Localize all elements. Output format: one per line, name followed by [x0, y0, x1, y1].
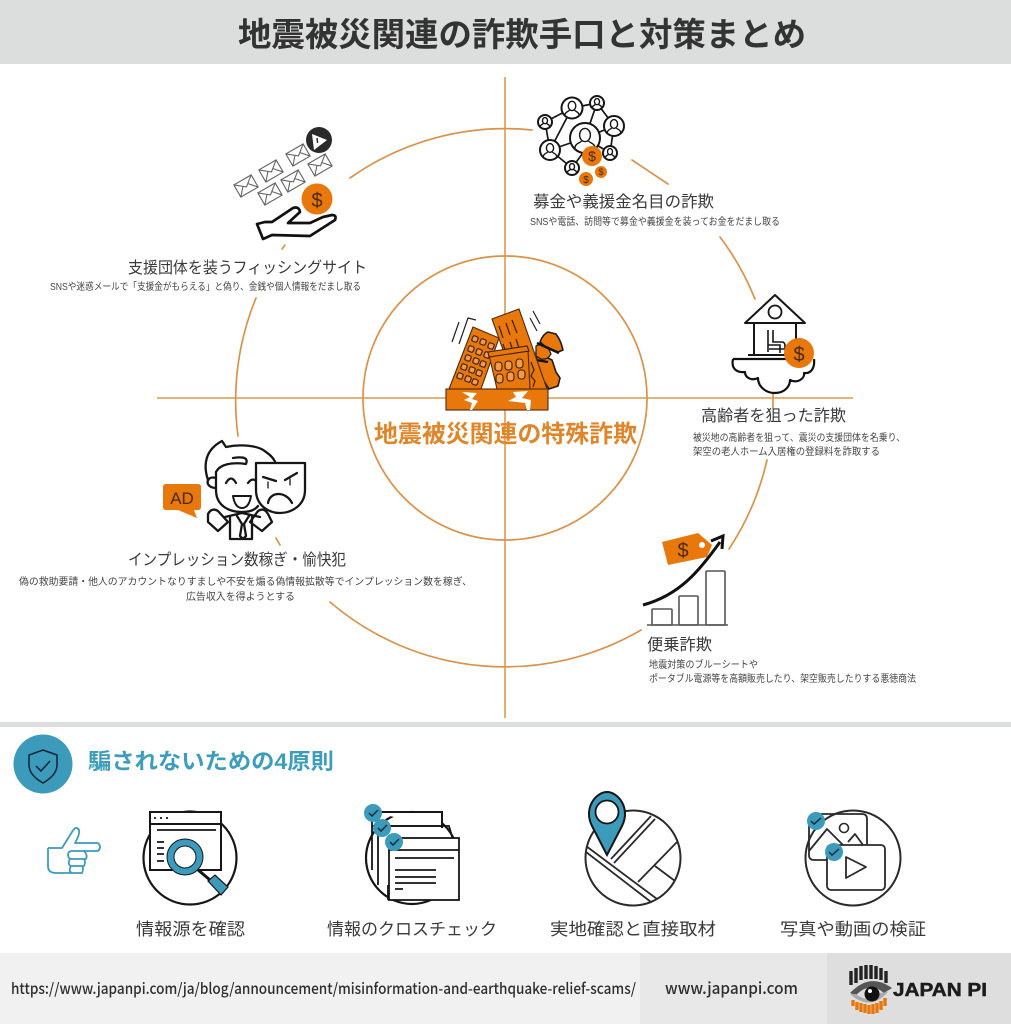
heading text: 騙されないための4原則: [88, 749, 334, 774]
description: 偽の救助要請・他人のアカウントなりすましや不安を煽る偽情報拡散等でインプレッション数を稼ぎ、: [19, 575, 472, 588]
heading: 支援団体を装うフィッシングサイト: [128, 259, 367, 277]
icon: people network and coins: $: [583, 175, 589, 186]
header band: [0, 0, 1011, 64]
icon: price tag and rising bars: [643, 533, 728, 625]
icon: house on cloud with coin: [733, 295, 814, 393]
footer: [0, 953, 1011, 1024]
logo: Japan PI: JAPAN PI: [893, 980, 987, 1000]
description: SNSや電話、訪問等で募金や義援金を装ってお金をだまし取る: [530, 215, 780, 228]
description: [19, 575, 472, 603]
icon: stacked documents and checks: [364, 804, 459, 904]
icon: image and video verification: [806, 810, 900, 906]
icon: people network and coins: $: [598, 167, 604, 177]
logo: Japan PI: [850, 965, 987, 1014]
icon: people network and coins: [538, 96, 624, 186]
cross axes: [157, 77, 853, 718]
cracked ground: [446, 389, 548, 410]
item: phishing: [50, 127, 367, 293]
label: 情報源を確認: [136, 920, 245, 939]
title: 地震被災関連の詐欺手口と対策まとめ: [238, 16, 806, 53]
man: [206, 441, 276, 539]
description: 被災地の高齢者を狙って、震災の支援団体を名乗り、: [693, 431, 905, 444]
inner circle: [363, 256, 647, 540]
principle 3: [550, 792, 716, 939]
heading: 募金や義援金名目の詐欺: [533, 193, 714, 211]
icon: house on cloud with coin: $: [793, 344, 805, 366]
item: donation scams: [530, 96, 780, 228]
description: 地震対策のブルーシートや: [649, 658, 758, 671]
description: SNSや迷惑メールで「支援金がもらえる」と偽り、金銭や個人情報をだまし取る: [50, 280, 361, 293]
outer ring arcs: [236, 129, 773, 667]
icon: pointing hand: [48, 828, 100, 873]
icon: shield: [14, 734, 72, 794]
description: 架空の老人ホーム入居権の登録料を詐取する: [693, 445, 880, 458]
rear building: [492, 309, 547, 389]
item: impressions: [19, 441, 472, 603]
label: 情報のクロスチェック: [327, 920, 497, 939]
central illustration: collapsing buildings and spy: [446, 309, 563, 410]
description: [649, 658, 916, 685]
principle 1: [136, 812, 245, 939]
label: 写真や動画の検証: [780, 920, 926, 939]
motion lines: [452, 311, 540, 344]
spy: [536, 332, 563, 389]
source url: https://www.japanpi.com/ja/blog/announcement/misinformation-and-earthquake-relief-scams/: [11, 978, 636, 999]
principle 4: [780, 810, 926, 939]
icon: envelopes, warning and hand with coin: $: [311, 190, 323, 212]
label: 実地確認と直接取材: [550, 920, 716, 939]
icon: browser and magnifier: [144, 812, 236, 904]
mask: [256, 463, 305, 513]
item: targeting the elderly: [693, 295, 905, 458]
heading: 高齢者を狙った詐欺: [701, 407, 846, 425]
section heading: four principles: [14, 734, 334, 794]
icon: smiling man, mask and AD bubble: [163, 441, 305, 539]
website: www.japanpi.com: [665, 975, 798, 999]
central heading: 地震被災関連の特殊詐欺: [374, 421, 637, 448]
icon: price tag and rising bars: $: [677, 540, 689, 562]
item: opportunistic scams: [643, 533, 916, 685]
description: [693, 431, 905, 458]
icon: envelopes, warning and hand with coin: [234, 127, 336, 239]
AD bubble: [163, 484, 201, 518]
icon: people network and coins: $: [588, 148, 596, 164]
principle 2: [327, 804, 497, 939]
description: 広告収入を得ようとする: [186, 590, 295, 603]
AD bubble: AD: [170, 489, 194, 508]
heading: 便乗詐欺: [647, 636, 712, 654]
heading: インプレッション数稼ぎ・愉快犯: [128, 551, 346, 569]
description: ポータブル電源等を高額販売したり、架空販売したりする悪徳商法: [649, 672, 916, 685]
section divider: [0, 722, 1011, 727]
icon: map and pin: [586, 792, 680, 906]
left building: [449, 327, 499, 389]
front building: [488, 346, 530, 389]
